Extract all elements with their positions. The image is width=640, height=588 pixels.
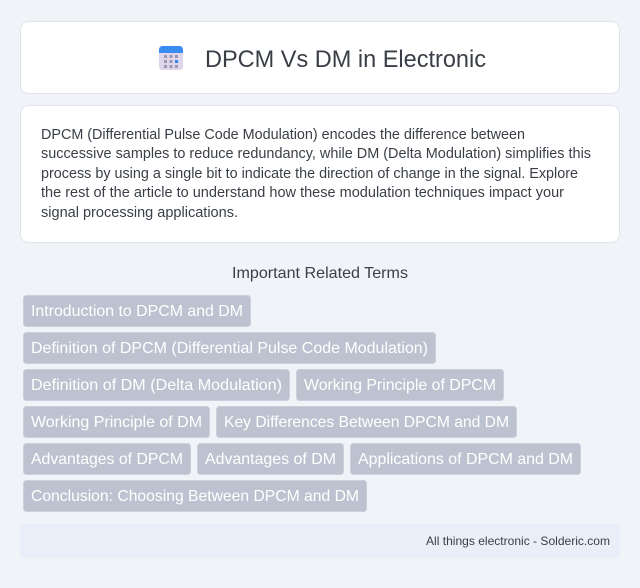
tag: conclusion: Conclusion: Choosing Between DPCM and DM — [31, 488, 359, 505]
tag: advantages of DM: Advantages of DM — [205, 451, 336, 468]
tag: advantages of DM — [198, 444, 344, 474]
footer text: All things electronic - Solderic.com — [426, 534, 610, 548]
text block: introduction: signal processing applications. — [41, 205, 238, 221]
tag: introduction: Introduction to DPCM and DM — [31, 303, 243, 320]
text block: introduction: process by using a single bit to indicate the direction of change in the signal. Explore — [41, 166, 578, 182]
tag: applications — [350, 444, 580, 474]
tag: definition of DM — [24, 370, 290, 400]
panel: introduction — [20, 106, 620, 242]
tag: working principle of DM: Working Principle of DM — [31, 414, 202, 431]
tag: working principle of DPCM — [296, 370, 504, 400]
heading: important related terms: Important Related Terms — [232, 265, 408, 282]
text block: introduction: successive samples to reduce redundancy, while DM (Delta Modulation) simplifies this — [41, 146, 591, 162]
tag: conclusion — [24, 480, 366, 512]
icon: calendar — [159, 46, 183, 70]
tag: definition of DPCM — [24, 332, 436, 364]
panel: related term tags — [24, 296, 580, 512]
title: DPCM Vs DM in Electronic — [205, 46, 486, 73]
footer — [20, 524, 620, 558]
tag: key differences — [216, 406, 516, 438]
text block: introduction — [41, 127, 591, 221]
tag: working principle of DPCM: Working Principle of DPCM — [304, 377, 496, 394]
tag: definition of DM: Definition of DM (Delta Modulation) — [31, 377, 282, 394]
tag: key differences: Key Differences Between DPCM and DM — [224, 414, 509, 431]
tag: applications: Applications of DPCM and DM — [358, 451, 573, 468]
panel: header — [20, 22, 620, 94]
tag: definition of DPCM: Definition of DPCM (Differential Pulse Code Modulation) — [31, 340, 428, 357]
tag: introduction — [24, 296, 250, 326]
tag: advantages of DPCM — [24, 444, 190, 474]
text block: introduction: the rest of the article to understand how these modulation techniques impact your — [41, 185, 564, 201]
tag: advantages of DPCM: Advantages of DPCM — [31, 451, 183, 468]
tag: working principle of DM — [24, 406, 210, 438]
text block: introduction: DPCM (Differential Pulse Code Modulation) encodes the difference between — [41, 127, 525, 143]
